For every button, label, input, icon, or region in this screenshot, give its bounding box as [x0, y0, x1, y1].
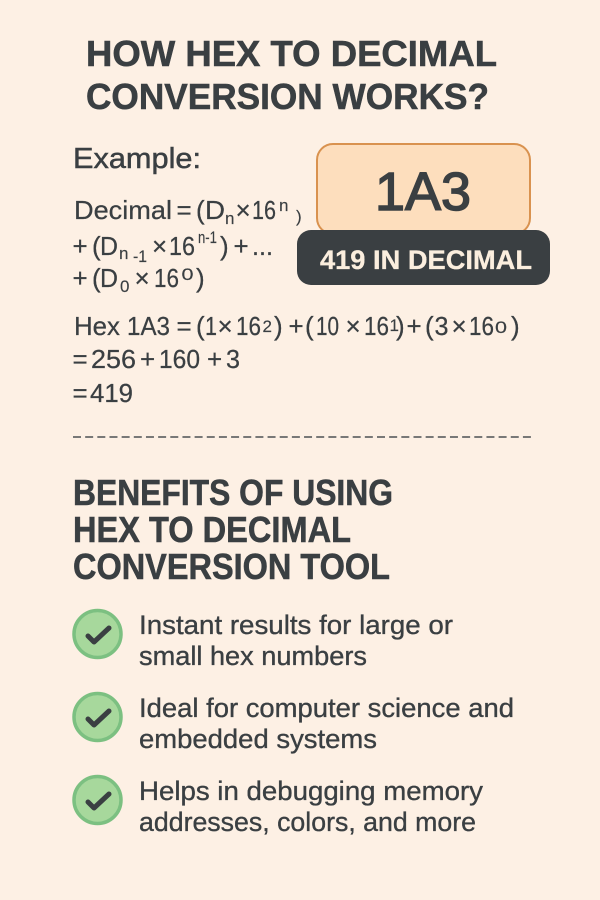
worked example: Hex: [74, 311, 120, 341]
title: [86, 33, 497, 117]
benefit: instant results: small hex numbers: [139, 641, 367, 671]
general formula: =: [176, 195, 192, 225]
worked example: 16: [236, 311, 261, 341]
benefit: ideal for computer science: embedded systems: [139, 724, 377, 754]
worked example: ×: [346, 311, 361, 341]
worked example: 0: [495, 318, 507, 337]
general formula: n: [279, 196, 288, 215]
worked example: ×: [452, 311, 467, 341]
worked example: ): [274, 311, 283, 341]
general formula: ...: [252, 231, 273, 261]
worked example: (: [305, 311, 314, 341]
general formula: 16: [169, 231, 195, 261]
worked example: =: [72, 378, 88, 408]
worked example: (: [425, 311, 434, 341]
worked example: 1: [205, 311, 217, 341]
general formula: ): [296, 207, 302, 226]
general formula: ): [220, 231, 229, 261]
worked example: 1A3: [127, 311, 170, 341]
worked example: 256: [91, 344, 136, 374]
worked example: ): [511, 311, 520, 341]
general formula: ×: [134, 263, 150, 293]
general formula: ): [196, 263, 205, 293]
worked example: [72, 311, 520, 408]
general formula: (: [92, 231, 101, 261]
heading: example: Example:: [73, 143, 201, 175]
general formula: ×: [236, 195, 251, 225]
general formula: [72, 195, 302, 296]
general formula: ×: [152, 231, 167, 261]
worked example: 3: [434, 311, 448, 341]
decimal result pill: 419 IN DECIMAL: [320, 245, 532, 275]
decimal result pill: [297, 230, 550, 285]
benefit: ideal for computer science: [74, 693, 514, 754]
worked example: +: [207, 344, 222, 374]
general formula: n: [119, 244, 128, 263]
benefit: instant results: [74, 610, 453, 671]
worked example: 16: [364, 311, 389, 341]
hex input box: 1A3: [375, 162, 471, 222]
worked example: ×: [218, 311, 233, 341]
benefit: debugging: [74, 776, 484, 837]
worked example: 10: [316, 311, 339, 341]
general formula: 0: [182, 265, 194, 284]
general formula: D: [100, 231, 118, 261]
benefit: ideal for computer science: Ideal for computer science and: [139, 693, 514, 723]
general formula: 16: [154, 263, 179, 293]
general formula: D: [100, 263, 118, 293]
worked example: 3: [226, 344, 240, 374]
heading: benefits: BENEFITS OF USING: [73, 472, 393, 513]
general formula: +: [234, 231, 249, 261]
general formula: n-1: [198, 228, 217, 247]
worked example: ): [396, 311, 405, 341]
worked example: 419: [90, 378, 133, 408]
general formula: (: [196, 195, 205, 225]
title: HOW HEX TO DECIMAL: [86, 33, 497, 74]
benefit: instant results: Instant results for large or: [139, 610, 453, 640]
heading: benefits: HEX TO DECIMAL: [73, 509, 351, 550]
worked example: +: [406, 311, 422, 341]
worked example: 16: [469, 311, 494, 341]
general formula: D: [205, 195, 225, 225]
worked example: +: [140, 344, 155, 374]
worked example: 2: [262, 317, 272, 336]
worked example: =: [72, 344, 88, 374]
general formula: +: [72, 231, 88, 261]
hex input box: [317, 144, 530, 234]
worked example: +: [288, 311, 304, 341]
title: CONVERSION WORKS?: [86, 76, 489, 117]
general formula: -1: [133, 247, 147, 266]
general formula: +: [72, 263, 88, 293]
benefit: debugging: addresses, colors, and more: [139, 807, 476, 837]
icon: check mark: [74, 694, 121, 740]
general formula: Decimal: [74, 195, 172, 225]
icon: check mark: [74, 776, 121, 824]
heading: benefits: [73, 472, 393, 587]
general formula: n: [225, 209, 234, 228]
benefit: debugging: Helps in debugging memory: [139, 776, 484, 806]
worked example: (: [196, 311, 205, 341]
general formula: 16: [252, 195, 276, 225]
worked example: 1: [390, 316, 399, 335]
general formula: (: [92, 263, 101, 293]
worked example: =: [176, 311, 192, 341]
general formula: 0: [120, 277, 129, 296]
icon: check mark: [74, 610, 121, 658]
heading: benefits: CONVERSION TOOL: [73, 546, 390, 587]
worked example: 160: [159, 344, 200, 374]
